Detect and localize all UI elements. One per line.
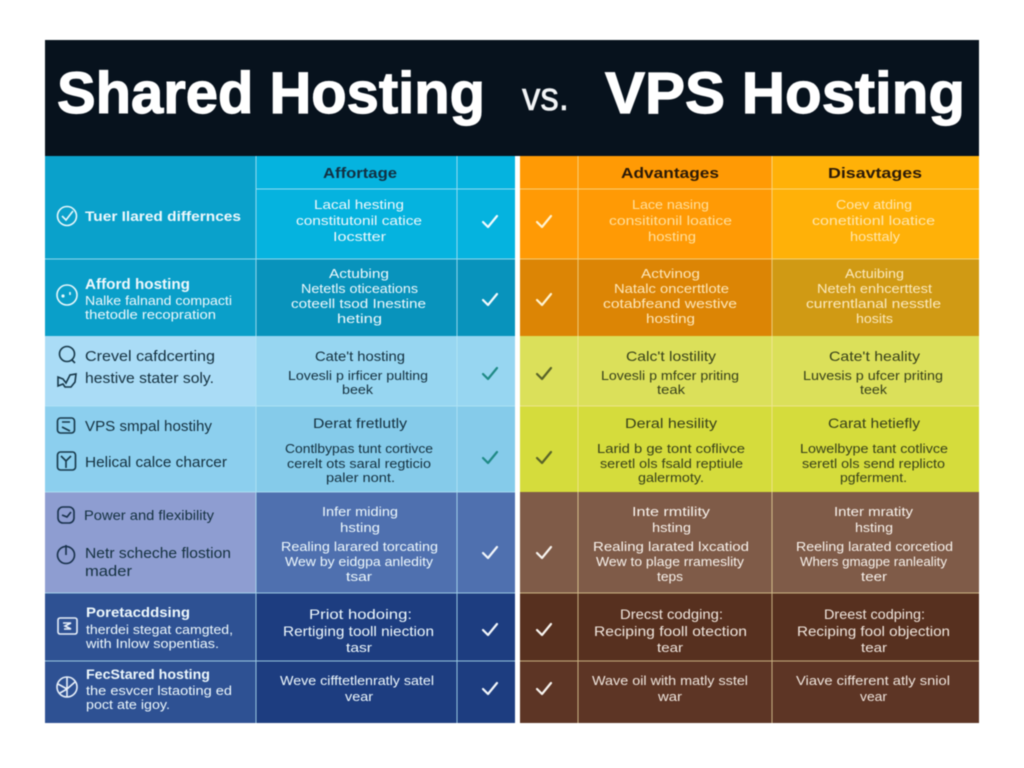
cell text: Actubing [329, 266, 389, 281]
feature label: Tuer Ilared differnces [85, 208, 241, 224]
cell text: Lacal hesting [314, 197, 404, 212]
row 2: afford hosting [57, 266, 497, 326]
header banner [45, 40, 979, 156]
disadvantage text [796, 504, 953, 584]
advantage text [609, 197, 732, 244]
disadvantage text [797, 606, 950, 655]
cell text [291, 266, 426, 326]
feature label: VPS smpal hostihy [85, 419, 213, 435]
advantage text: cotabfeand westive [603, 296, 737, 311]
disadvantage text: Dreest codping: [824, 606, 925, 622]
advantage text [594, 606, 747, 655]
icon: check mark [483, 547, 497, 558]
cell text: paler nont. [326, 470, 395, 485]
feature label: poct ate igoy. [86, 697, 170, 712]
advantage text: Inte rmtility [632, 504, 711, 519]
advantage text: war [657, 689, 683, 704]
disadvantage text: Cate't heality [829, 348, 920, 364]
icon: globe [57, 677, 77, 697]
row 2: vps values [537, 266, 941, 326]
advantage text [593, 504, 749, 584]
icon: leaf [58, 452, 76, 470]
disadvantage text: vear [860, 689, 888, 704]
cell text: Netetls oticeations [301, 281, 419, 296]
row 3: vps values [537, 348, 943, 397]
disadvantage text [806, 266, 941, 326]
advantage text: galermoty. [638, 470, 704, 485]
disadvantage text: Inter mratity [834, 504, 914, 519]
row 5: vps values [537, 504, 953, 584]
feature label: thetodle recopration [85, 307, 216, 322]
disadvantage text: Viave cifferent atly sniol [796, 673, 950, 688]
row 7: fecstared hosting [57, 666, 497, 712]
icon: check mark [537, 624, 551, 635]
feature label: therdei stegat camgted, [86, 622, 233, 637]
icon: check circle [58, 206, 76, 226]
advantage text: hosting [646, 311, 695, 326]
icon: check mark [537, 547, 551, 558]
title: versus: vs. [522, 75, 569, 119]
panel: vps hosting table [520, 156, 979, 723]
advantage text: Natalc oncerttlote [614, 281, 729, 296]
disadvantage text: conetitionl loatice [812, 213, 935, 228]
row 6: vps values [537, 606, 950, 655]
disadvantage text: hsting [855, 520, 893, 535]
disadvantage text: hosttaly [850, 229, 901, 244]
row 1: shared hosting [58, 197, 497, 244]
icon: magnifier [60, 346, 75, 363]
advantage text: Deral hesility [625, 415, 717, 431]
advantage text [592, 673, 748, 704]
advantage text: Reciping fooll otection [594, 623, 747, 639]
advantage text: consititonil loatice [609, 213, 732, 228]
disadvantage text [796, 673, 950, 704]
column heading: advantages: Advantages [621, 165, 719, 182]
feature label [85, 419, 227, 471]
row 7: vps values [537, 673, 950, 704]
cell text: vear [345, 689, 374, 704]
advantage text: Calc't lostility [626, 348, 716, 364]
feature label [86, 666, 232, 712]
disadvantage text [812, 197, 935, 244]
icon: tools [58, 418, 74, 433]
cell text: coteell tsod Inestine [291, 296, 426, 311]
disadvantage text: seretl ols send replicto [802, 456, 945, 471]
icon: gauge [58, 507, 74, 523]
disadvantage text: currentlanal nesstle [806, 296, 941, 311]
icon: check mark [537, 452, 551, 463]
disadvantage text: Luvesis p ufcer priting [803, 368, 943, 383]
icon: check mark [483, 294, 497, 305]
advantage text: Wew to plage rrameslity [596, 554, 745, 569]
advantage text: teps [657, 569, 684, 584]
advantage text [601, 348, 739, 397]
advantage text [597, 415, 745, 485]
panel: shared hosting table [45, 156, 515, 723]
cell text [288, 348, 428, 397]
disadvantage text: teek [860, 382, 888, 397]
cell text: Contlbypas tunt cortivce [285, 441, 433, 456]
disadvantage text: Reciping fool objection [797, 623, 950, 639]
icon: check mark [537, 368, 551, 379]
feature label: FecStared hosting [86, 666, 210, 682]
row backgrounds: left table [45, 156, 515, 723]
cell text: Iocstter [333, 229, 387, 244]
feature label [85, 276, 232, 322]
row 5: power and flexibility [58, 504, 497, 584]
disadvantage text: Whers gmagpe ranleality [800, 554, 948, 569]
cell text: Wew by eidgpa anledity [285, 554, 434, 569]
column heading: disadvantages: Disavtages [828, 165, 922, 182]
icon: check mark [483, 624, 497, 635]
feature label: the esvcer lstaoting ed [86, 683, 232, 698]
icon: code box [58, 618, 77, 634]
disadvantage text: Neteh enhcerttest [817, 281, 932, 296]
feature label: Netr scheche flostion [85, 546, 231, 562]
advantage text: Wave oil with matly sstel [592, 673, 748, 688]
column heading: affortage: Affortage [323, 165, 397, 182]
cell text: Lovesli p irficer pulting [288, 368, 428, 383]
disadvantage text [803, 348, 943, 397]
cell text: Infer miding [322, 504, 398, 519]
feature label: mader [85, 564, 132, 580]
feature label [85, 604, 233, 651]
cell text: Derat fretlutly [313, 415, 407, 431]
advantage text: Lovesli p mfcer priting [601, 368, 739, 383]
advantage text: Actvinog [641, 266, 700, 281]
disadvantage text: pgferment. [840, 470, 907, 485]
feature label: Poretacddsing [86, 604, 190, 620]
cell text [281, 504, 438, 584]
row 4: vps hosting [58, 415, 497, 485]
cell text: cerelt ots saral regticio [287, 456, 431, 471]
feature label: Nalke falnand compacti [85, 293, 232, 308]
cell text [296, 197, 422, 244]
icon: check mark [537, 216, 551, 227]
advantage text: Lace nasing [632, 197, 709, 212]
feature label: Power and flexibility [84, 507, 214, 523]
icon: check mark [483, 216, 497, 227]
advantage text: teak [657, 382, 686, 397]
icon: timer [58, 545, 74, 564]
title: shared hosting: Shared Hosting [57, 61, 485, 126]
row backgrounds: right table [520, 156, 979, 723]
icon: clock face [57, 285, 77, 305]
advantage text: tear [657, 640, 684, 655]
cell text: Rertiging tooll niection [283, 623, 434, 639]
cell text: beek [342, 382, 374, 397]
disadvantage text [800, 415, 948, 485]
disadvantage text: Reeling larated corcetiod [796, 539, 953, 554]
row 6: poretacddsing [58, 604, 497, 655]
feature label [84, 507, 231, 580]
disadvantage text: Lowelbype tant cotlivce [800, 441, 948, 456]
disadvantage text: Carat hetiefly [828, 415, 920, 431]
feature label: with Inlow sopentias. [85, 636, 219, 651]
feature label: Helical calce charcer [85, 455, 227, 471]
cell text: hsting [340, 520, 380, 535]
cell text [280, 673, 434, 704]
cell text [283, 606, 434, 655]
cell text: heting [337, 311, 382, 326]
disadvantage text: Actuibing [845, 266, 904, 281]
cell text: Cate't hosting [315, 348, 405, 364]
cell text: tasr [346, 640, 373, 655]
cell text: tsar [346, 569, 373, 584]
feature label: hestive stater soly. [85, 371, 214, 387]
disadvantage text: hosits [856, 311, 894, 326]
icon: check mark [483, 683, 497, 694]
title: vps hosting: VPS Hosting [605, 61, 965, 126]
icon: check mark [537, 294, 551, 305]
cell text: Realing larared torcating [281, 539, 438, 554]
feature label: Crevel cafdcerting [85, 349, 215, 365]
advantage text: seretl ols fsald reptiule [600, 456, 743, 471]
feature label [85, 349, 215, 387]
cell text: Priot hodoing: [309, 606, 412, 622]
advantage text: hosting [648, 229, 696, 244]
cell text: constitutonil catice [296, 213, 422, 228]
advantage text: Larid b ge tont coflivce [597, 441, 745, 456]
advantage text: hsting [652, 520, 691, 535]
advantage text: Drecst codging: [620, 606, 723, 622]
disadvantage text: tear [861, 640, 888, 655]
advantage text [603, 266, 737, 326]
cell text [285, 415, 433, 485]
feature label: Afford hosting [85, 276, 190, 293]
row 4: vps values [537, 415, 948, 485]
disadvantage text: Coev atding [836, 197, 912, 212]
icon: check mark [483, 368, 497, 379]
icon: hands [58, 374, 76, 387]
advantage text: Realing larated lxcatiod [593, 539, 749, 554]
icon: check mark [483, 452, 497, 463]
cell text: Weve cifftetlenratly satel [280, 673, 434, 688]
row 1: vps values [537, 197, 935, 244]
row 3: crevel cafdcerting [58, 346, 497, 397]
icon: check mark [537, 683, 551, 694]
disadvantage text: teer [861, 569, 888, 584]
